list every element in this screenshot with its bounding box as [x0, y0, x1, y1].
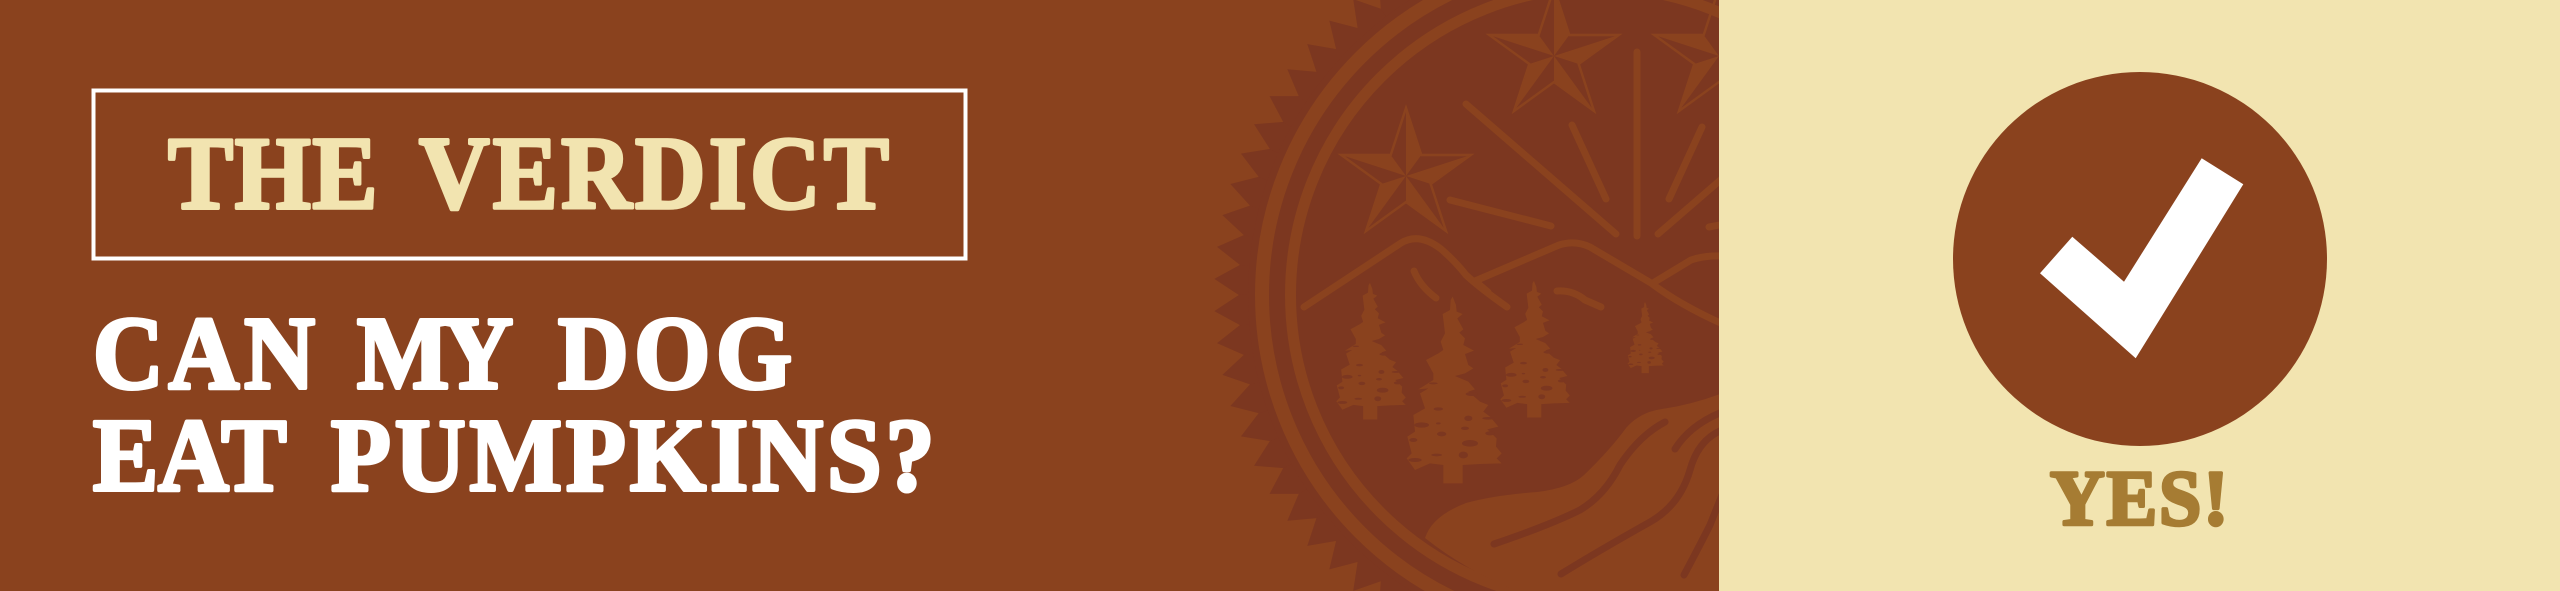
- seal: star right: [1654, 0, 1784, 111]
- seal: mountains: [1304, 239, 1725, 325]
- icon: check mark badge: [1953, 72, 2327, 446]
- seal: tree 1: [1336, 283, 1406, 420]
- seal: tree 3: [1500, 281, 1570, 418]
- badge circle: [1953, 72, 2327, 446]
- question line 1: DOG: [558, 295, 792, 411]
- question line 2: PUMPKINS?: [331, 397, 934, 513]
- panel: cream answer panel: [1719, 0, 2560, 591]
- seal: starburst edge: [1132, 0, 2161, 591]
- heading: the verdict: THE: [168, 115, 378, 231]
- watermark seal: [1214, 0, 1719, 591]
- check mark: [2040, 158, 2243, 358]
- question line 1: [93, 295, 792, 411]
- seal: sun rays: [1450, 52, 1725, 236]
- seal: river streams: [1494, 412, 1722, 575]
- question line 1: MY: [357, 295, 513, 411]
- seal: river: [1425, 392, 1725, 591]
- question line 1: CAN: [93, 295, 315, 411]
- seal: disc and rings: [1248, 0, 1948, 591]
- seal: star left: [1341, 108, 1471, 231]
- question line 2: EAT: [93, 397, 287, 513]
- heading: the verdict: VERDICT: [419, 115, 889, 231]
- seal: star centre: [1489, 0, 1619, 111]
- heading: the verdict: [168, 115, 889, 231]
- seal: tree 4: [1628, 302, 1664, 373]
- panel: verdict heading box: [94, 90, 966, 258]
- seal: tree 2: [1407, 297, 1502, 483]
- answer: yes: YES!: [2050, 455, 2228, 542]
